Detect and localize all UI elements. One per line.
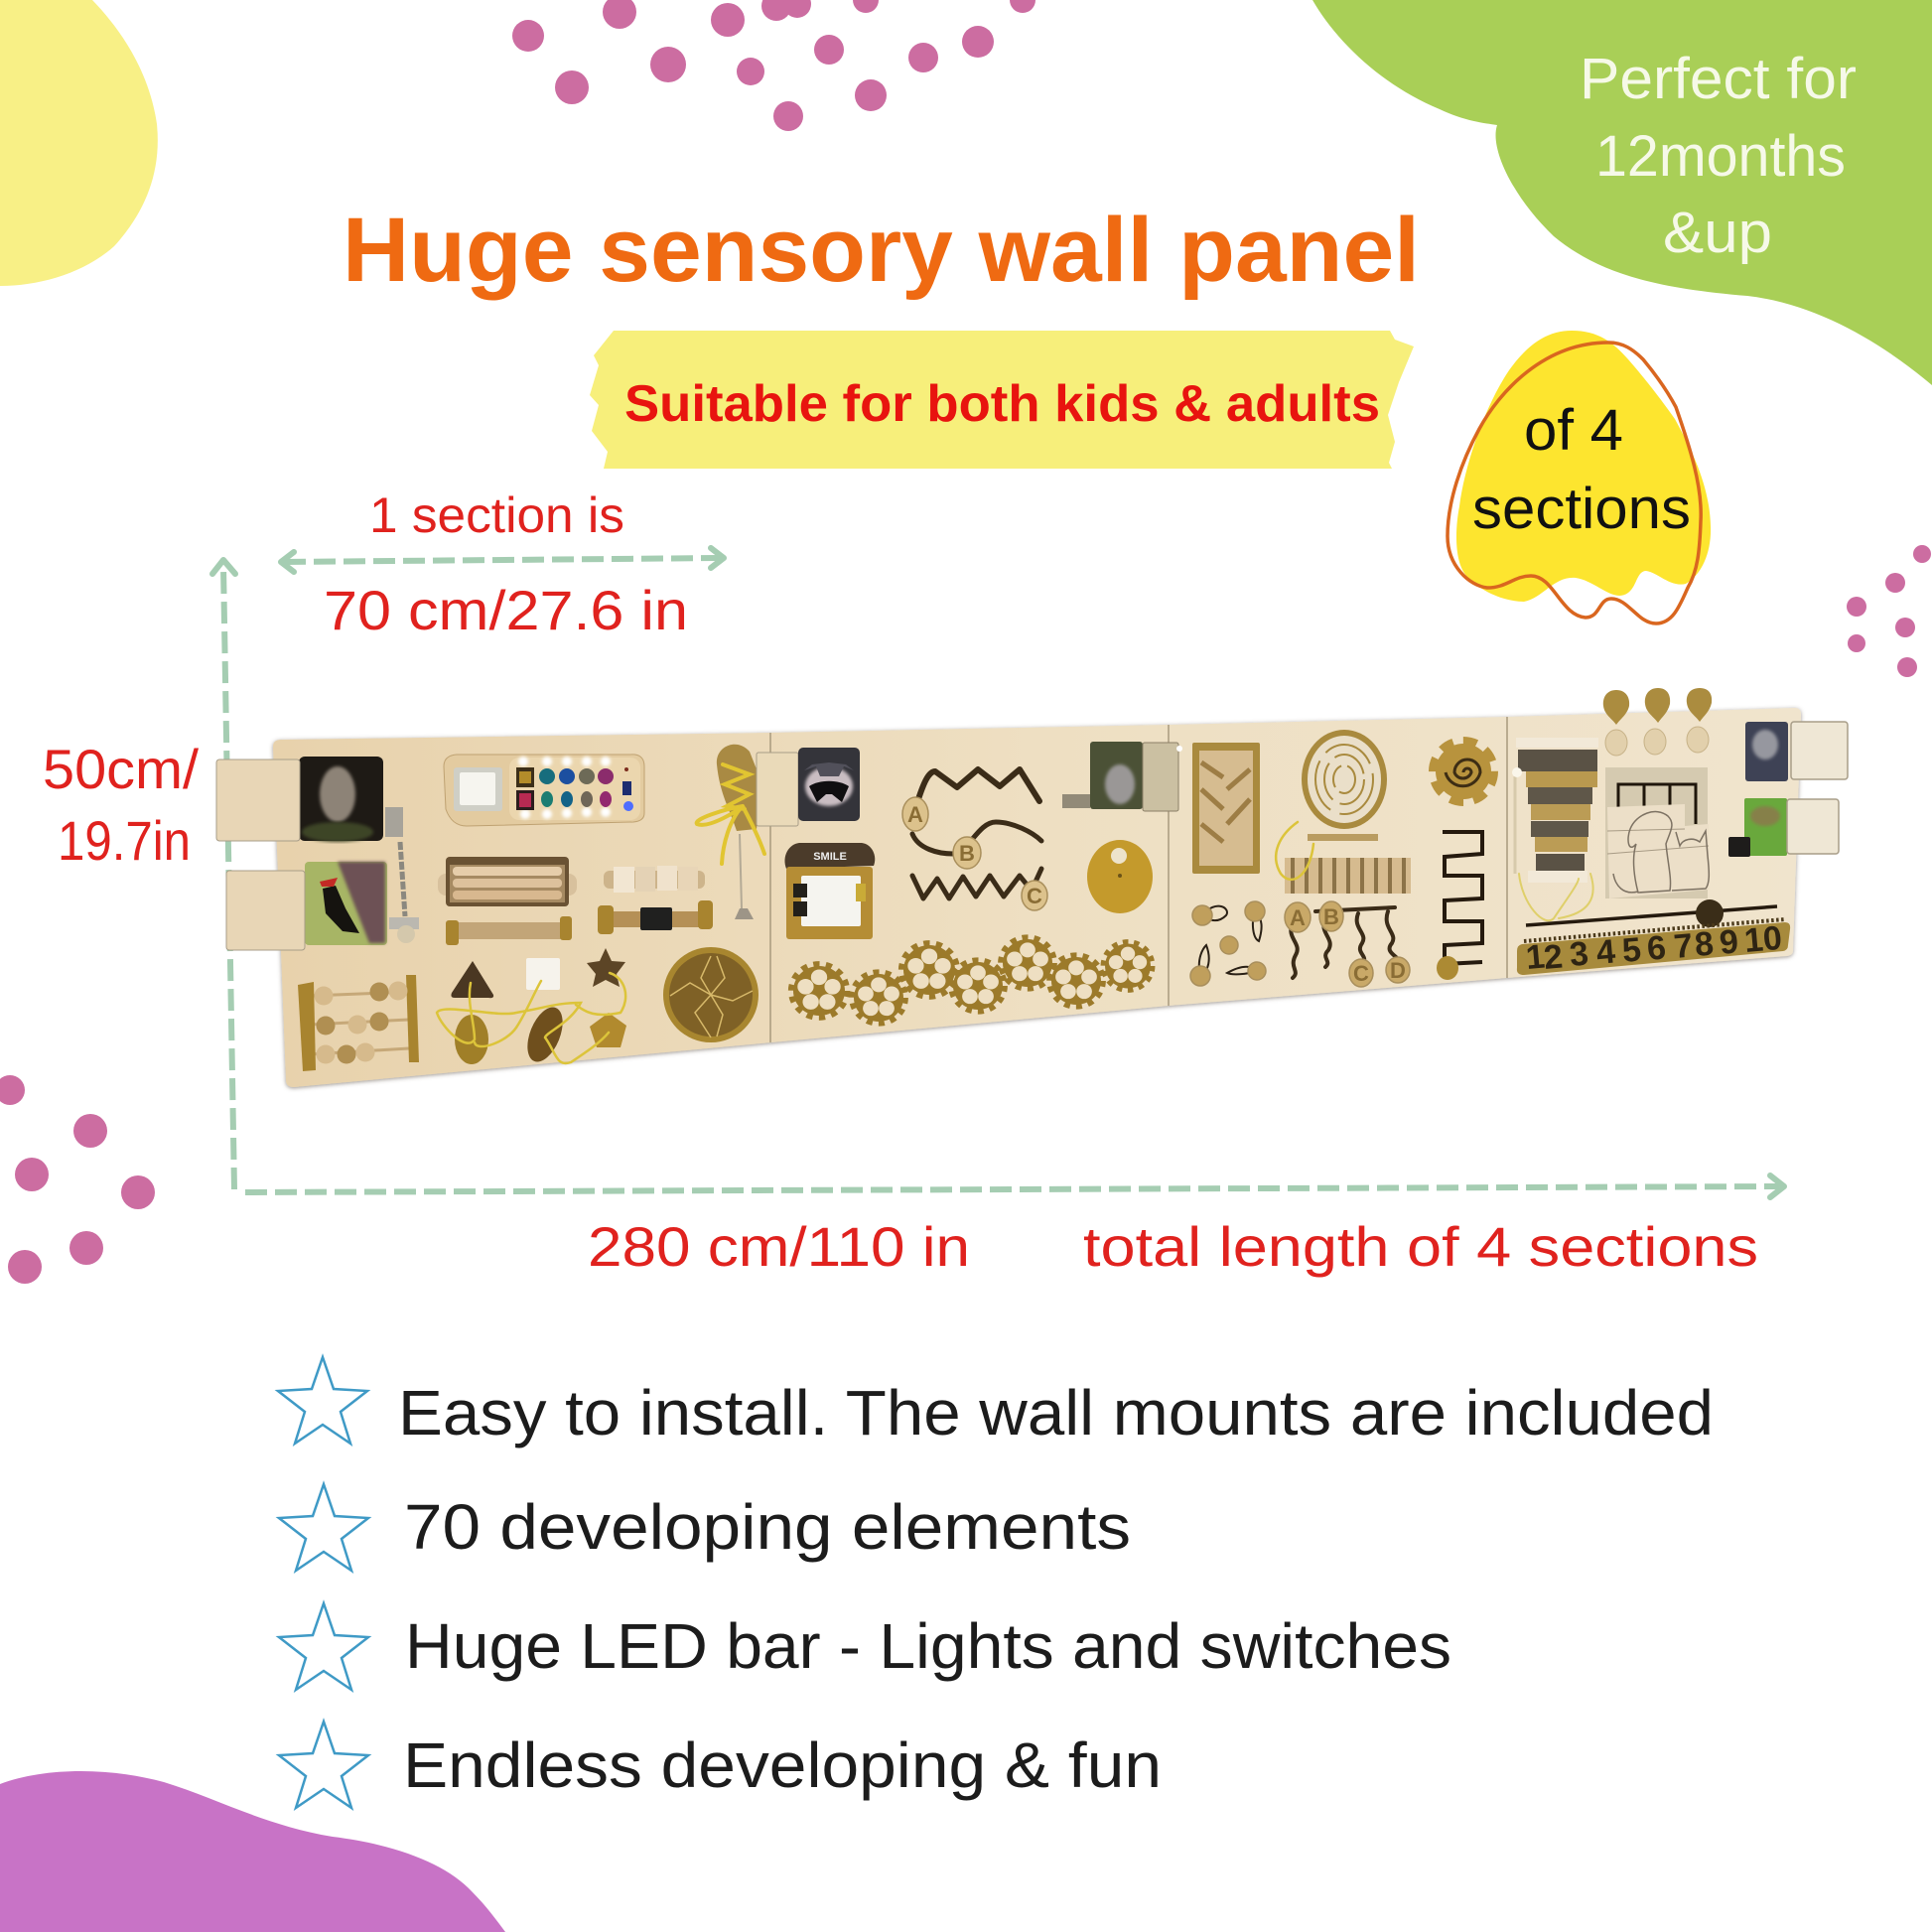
letter tracks with discs: C	[1027, 884, 1042, 908]
wiggle tracks with letter discs: A	[1290, 905, 1306, 930]
feature: developing elements: 70 developing elements	[404, 1491, 1131, 1563]
section 1 owl photo	[299, 757, 383, 842]
seam flap	[757, 753, 798, 826]
left flaps	[216, 759, 305, 950]
comb xylophone	[1276, 822, 1411, 894]
icon: star 4	[279, 1722, 368, 1808]
number ruler: 6	[1645, 928, 1668, 968]
wiggle tracks with letter discs: B	[1323, 904, 1339, 929]
badge: of 4 sections: of 4	[1524, 398, 1623, 463]
icon: star 3	[279, 1603, 368, 1690]
LED switch panel	[444, 755, 644, 826]
icon: star 1	[278, 1357, 367, 1444]
number ruler	[1517, 919, 1790, 977]
number ruler: 5	[1620, 930, 1643, 970]
right flaps	[1787, 722, 1848, 854]
letter tracks with discs	[902, 769, 1047, 910]
dots: pink right cluster	[1847, 545, 1931, 677]
arrow: height vertical	[212, 560, 235, 1189]
woodpecker photo	[305, 862, 387, 945]
wiggle tracks with letter discs: C	[1353, 961, 1369, 986]
smile door: SMILE	[813, 851, 847, 863]
feature: easy to install: Easy to install. The wall mounts are included	[398, 1377, 1714, 1449]
wiggle tracks with letter discs	[1285, 901, 1410, 987]
picture blocks	[604, 866, 705, 893]
smile door	[784, 843, 875, 939]
chain latch	[385, 807, 419, 943]
number ruler: 7	[1672, 926, 1695, 966]
squirrel photo with latch and flap	[1062, 742, 1182, 811]
number ruler: 3	[1568, 934, 1590, 974]
yellow dial disc	[1087, 840, 1153, 913]
letter tracks with discs: A	[907, 802, 923, 827]
board surface	[273, 708, 1801, 1087]
hanging shape tiles	[1605, 727, 1709, 756]
section 2 raccoon photo	[798, 748, 860, 821]
badge: of 4 sections: sections	[1472, 477, 1691, 541]
dots: pink left cluster	[0, 1075, 155, 1284]
label: one section size: 70 cm/27.6 in	[324, 579, 688, 641]
wiggle tracks with letter discs: D	[1390, 958, 1406, 983]
label: one section size	[324, 487, 688, 641]
section seams	[770, 717, 1507, 1042]
wooden roller	[438, 857, 577, 906]
dots: pink top cluster	[512, 0, 1035, 131]
sensory wall panel board	[216, 688, 1848, 1087]
label: total length value: 280 cm/110 in	[588, 1215, 970, 1278]
slider track with gear	[1526, 899, 1777, 927]
dog and cat slide puzzle	[1605, 767, 1709, 898]
icon: star 2	[279, 1484, 368, 1571]
number ruler: 9	[1718, 922, 1740, 962]
elastic loop pegs	[1190, 901, 1266, 986]
label: height	[43, 738, 199, 872]
strap	[446, 916, 572, 945]
lacing shapes	[437, 948, 626, 1067]
sun spiral	[1434, 742, 1493, 801]
label: total length caption: total length of 4 sections	[1083, 1215, 1758, 1278]
right photos	[1728, 722, 1788, 857]
abacus	[298, 975, 419, 1071]
blob: purple bottom left	[0, 1771, 505, 1932]
number ruler: 2	[1542, 937, 1565, 977]
blob: green top right	[1312, 0, 1932, 385]
arrow: section width	[281, 548, 724, 572]
ribbon: subtitle banner	[590, 331, 1414, 469]
arrow: total length horizontal	[245, 1175, 1784, 1197]
callout: age recommendation: Perfect for	[1580, 47, 1857, 111]
label: height: 19.7in	[58, 809, 191, 872]
gear chain	[792, 939, 1151, 1022]
number ruler: 10	[1742, 919, 1783, 960]
label: one section size: 1 section is	[369, 487, 624, 543]
blob: yellow top left	[0, 0, 158, 286]
badge: of 4 sections	[1448, 331, 1711, 623]
ribbon: subtitle banner: Suitable for both kids & adults	[624, 375, 1380, 433]
callout: age recommendation: 12months	[1595, 124, 1846, 189]
section 4 stacked xylophone	[1512, 738, 1598, 920]
number ruler: 1	[1524, 937, 1547, 977]
buckle strap	[598, 900, 713, 934]
label: height: 50cm/	[43, 738, 199, 800]
feature: LED bar: Huge LED bar - Lights and switches	[405, 1610, 1451, 1682]
feature: endless fun: Endless developing & fun	[403, 1729, 1162, 1801]
number ruler: 4	[1594, 932, 1617, 972]
serpentine track	[1437, 832, 1482, 980]
callout: age recommendation: &up	[1663, 201, 1772, 265]
lacing shoe and bell	[697, 745, 764, 919]
animal paths puzzle disc	[663, 947, 759, 1042]
hanging shape balloons	[1603, 688, 1712, 725]
round labyrinth	[1302, 730, 1387, 841]
letter tracks with discs: B	[959, 841, 975, 866]
feature list	[278, 1357, 1714, 1808]
number ruler: 8	[1693, 924, 1716, 964]
section 3 ball maze frame	[1192, 743, 1260, 874]
callout: age recommendation	[1580, 47, 1857, 265]
title: Huge sensory wall panel	[343, 200, 1420, 301]
